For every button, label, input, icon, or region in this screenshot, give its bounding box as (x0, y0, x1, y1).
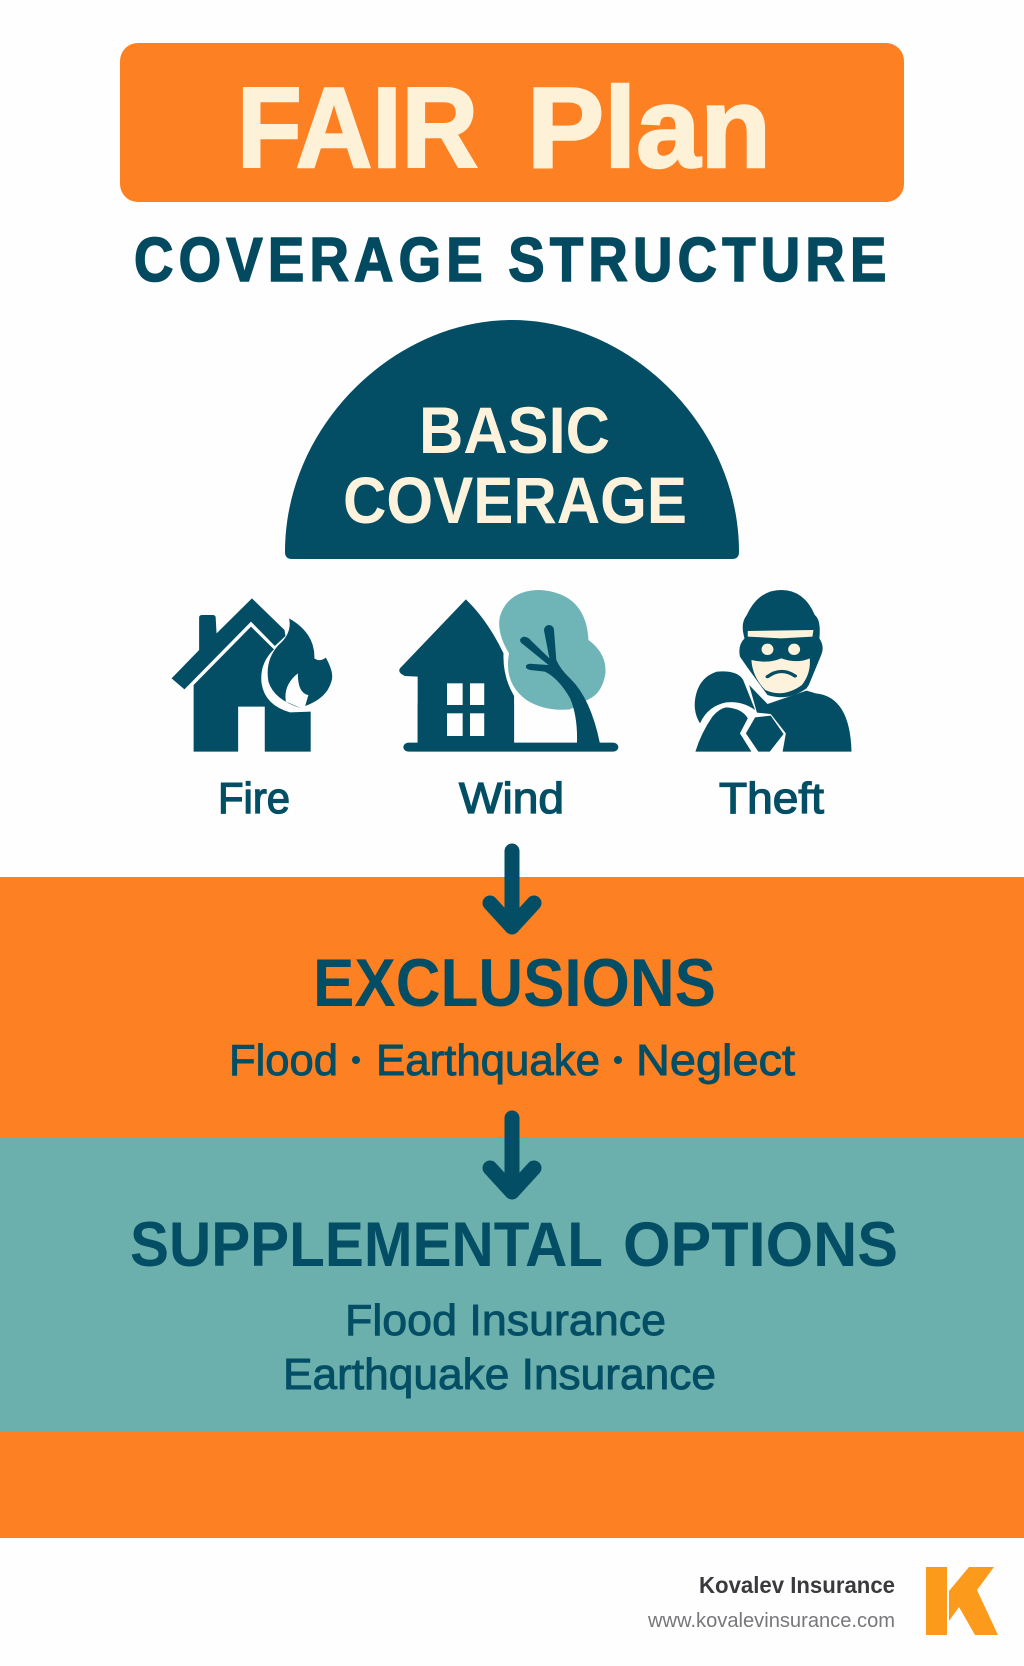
panel: exclusions band (0, 877, 1024, 1138)
title banner: Plan (527, 65, 771, 192)
panel: exclusions band: Neglect (636, 1036, 795, 1085)
icon: house and tree in wind (399, 590, 618, 752)
panel: basic coverage dome: BASIC (419, 393, 610, 467)
panel: supplemental options band: Earthquake Insurance (283, 1350, 716, 1399)
panel: basic coverage dome: COVERAGE (343, 463, 687, 537)
label: theft: Theft (719, 774, 824, 823)
panel: exclusions band: EXCLUSIONS (313, 945, 716, 1021)
label: wind: Wind (459, 774, 564, 823)
arrow: coverage to exclusions (490, 851, 534, 927)
icon: masked thief with bag (695, 590, 852, 752)
subtitle: COVERAGE STRUCTURE (134, 226, 886, 295)
icon: house on fire (172, 598, 332, 752)
label: fire: Fire (218, 774, 290, 823)
panel: supplemental options band (0, 1138, 1024, 1432)
icon: K logo (926, 1567, 998, 1635)
panel: supplemental options band: OPTIONS (623, 1210, 898, 1280)
footer brand name: Kovalev Insurance (699, 1572, 895, 1598)
panel: supplemental options band: SUPPLEMENTAL (130, 1210, 603, 1280)
panel: exclusions band: Flood (229, 1036, 338, 1085)
panel: supplemental options band: Flood Insurance (345, 1296, 666, 1345)
arrow: exclusions to supplemental options (490, 1118, 534, 1192)
panel: exclusions band: Earthquake (376, 1036, 600, 1085)
title banner: FAIR (237, 65, 478, 192)
title banner (120, 43, 904, 202)
panel: basic coverage dome (285, 320, 739, 559)
panel: bottom orange strip (0, 1432, 1024, 1538)
footer website: www.kovalevinsurance.com (647, 1610, 895, 1632)
